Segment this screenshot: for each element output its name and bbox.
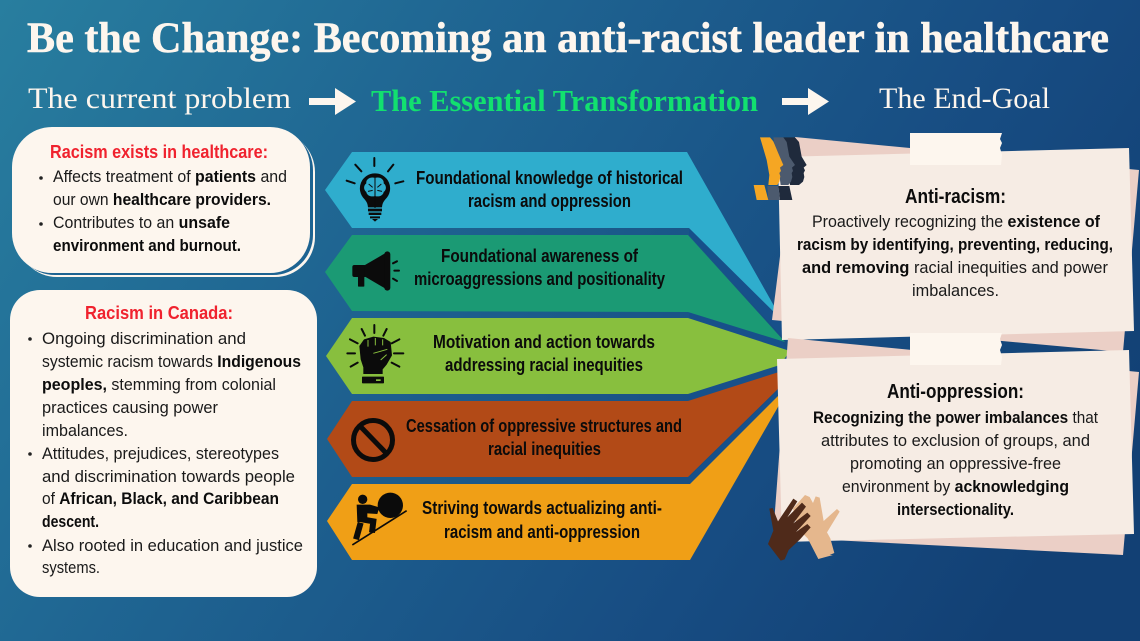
heading: anti-oppression: Anti-oppression:: [887, 381, 1024, 403]
heading: the current problem: The current problem: [28, 82, 291, 115]
note: anti-oppression: [768, 333, 1139, 561]
icon: person pushing boulder: [352, 493, 407, 545]
tape: [910, 333, 1002, 365]
bullet list: canada: practices causing power: [42, 398, 218, 417]
text: anti-racism definition: and removing racial inequities and power: [802, 258, 1108, 277]
icon: three faces: [754, 137, 807, 200]
text: chevron 2: Foundational awareness of: [441, 246, 639, 266]
text: anti-oppression definition: [813, 408, 1098, 519]
text: chevron 1: Foundational knowledge of historical: [416, 168, 683, 188]
heading: anti-racism: Anti-racism:: [905, 186, 1006, 208]
chevron 3: motivation and action: [326, 318, 790, 394]
heading: racism exists: Racism exists in healthcare:: [50, 142, 268, 162]
text: chevron 4: Cessation of oppressive structures and: [406, 416, 682, 436]
icon: prohibition sign: [354, 420, 392, 460]
text: anti-oppression definition: attributes to exclusion of groups, and: [821, 431, 1090, 450]
text: chevron 1: [416, 168, 683, 211]
bullet list: canada: [28, 329, 303, 577]
bullet list: canada: systemic racism towards Indigenous: [42, 352, 301, 371]
text: anti-racism definition: racism by identifying, preventing, reducing,: [797, 235, 1113, 254]
text: anti-oppression definition: Recognizing the power imbalances that: [813, 408, 1098, 427]
bullet list: canada: Ongoing discrimination and: [42, 329, 246, 348]
bullet list: healthcare effects: Contributes to an unsafe: [53, 213, 230, 232]
panel: racism in canada: [10, 290, 317, 597]
bullet list: canada: descent.: [42, 512, 99, 531]
text: chevron 4: racial inequities: [488, 439, 601, 459]
bullet list: healthcare effects: environment and burnout.: [53, 236, 241, 255]
bullet list: healthcare effects: our own healthcare providers.: [53, 190, 271, 209]
bullet list: canada: imbalances.: [42, 421, 128, 440]
heading: the end-goal: The End-Goal: [879, 82, 1050, 115]
text: anti-racism definition: [797, 212, 1113, 300]
icon: two hands: [768, 495, 840, 561]
heading: racism in canada: Racism in Canada:: [85, 303, 233, 323]
icon: raised fist: [347, 325, 403, 383]
text: anti-racism definition: Proactively recognizing the existence of: [812, 212, 1100, 231]
text: chevron 2: microaggressions and positionality: [414, 269, 665, 289]
text: chevron 2: [414, 246, 665, 289]
icon: megaphone: [352, 251, 399, 291]
note: anti-racism: [754, 133, 1139, 352]
icon: lightbulb with brain: [347, 158, 403, 222]
text: chevron 3: Motivation and action towards: [433, 332, 655, 352]
tape: [910, 133, 1002, 165]
text: chevron 4: [406, 416, 682, 459]
bullet list: canada: systems.: [42, 558, 100, 577]
arrow: transformation to goal: [782, 88, 829, 115]
title: Be the Change: Becoming an anti-racist leader in healthcare: [27, 15, 1109, 62]
chevron 1: foundational knowledge: [325, 152, 782, 320]
text: anti-oppression definition: intersectionality.: [897, 500, 1014, 519]
bullet list: canada: peoples, stemming from colonial: [42, 375, 276, 394]
chevron 5: striving towards anti-racism: [327, 392, 782, 560]
bullet list: healthcare effects: Affects treatment of patients and: [53, 167, 287, 186]
chevron 4: cessation of oppressive structures: [327, 371, 782, 477]
bullet list: canada: Attitudes, prejudices, stereotypes: [42, 444, 279, 463]
bullet list: healthcare effects: [39, 167, 287, 255]
text: chevron 3: addressing racial inequities: [445, 355, 643, 375]
text: chevron 5: [422, 498, 662, 542]
bullet list: canada: of African, Black, and Caribbean: [42, 489, 279, 508]
arrow: problem to transformation: [309, 88, 356, 115]
chevron 2: foundational awareness: [325, 235, 785, 342]
bullet list: canada: and discrimination towards people: [42, 467, 295, 486]
text: chevron 1: racism and oppression: [468, 191, 631, 211]
heading: the essential transformation: The Essential Transformation: [371, 83, 758, 118]
text: chevron 3: [433, 332, 655, 375]
connector shadows: [689, 228, 790, 484]
text: chevron 5: racism and anti-oppression: [444, 522, 640, 542]
panel: racism exists in healthcare: [12, 127, 315, 277]
text: anti-oppression definition: environment by acknowledging: [842, 477, 1069, 496]
text: anti-oppression definition: promoting an oppressive-free: [850, 454, 1061, 473]
bullet list: canada: Also rooted in education and justice: [42, 536, 303, 555]
text: anti-racism definition: imbalances.: [912, 281, 999, 300]
text: chevron 5: Striving towards actualizing anti-: [422, 498, 662, 518]
